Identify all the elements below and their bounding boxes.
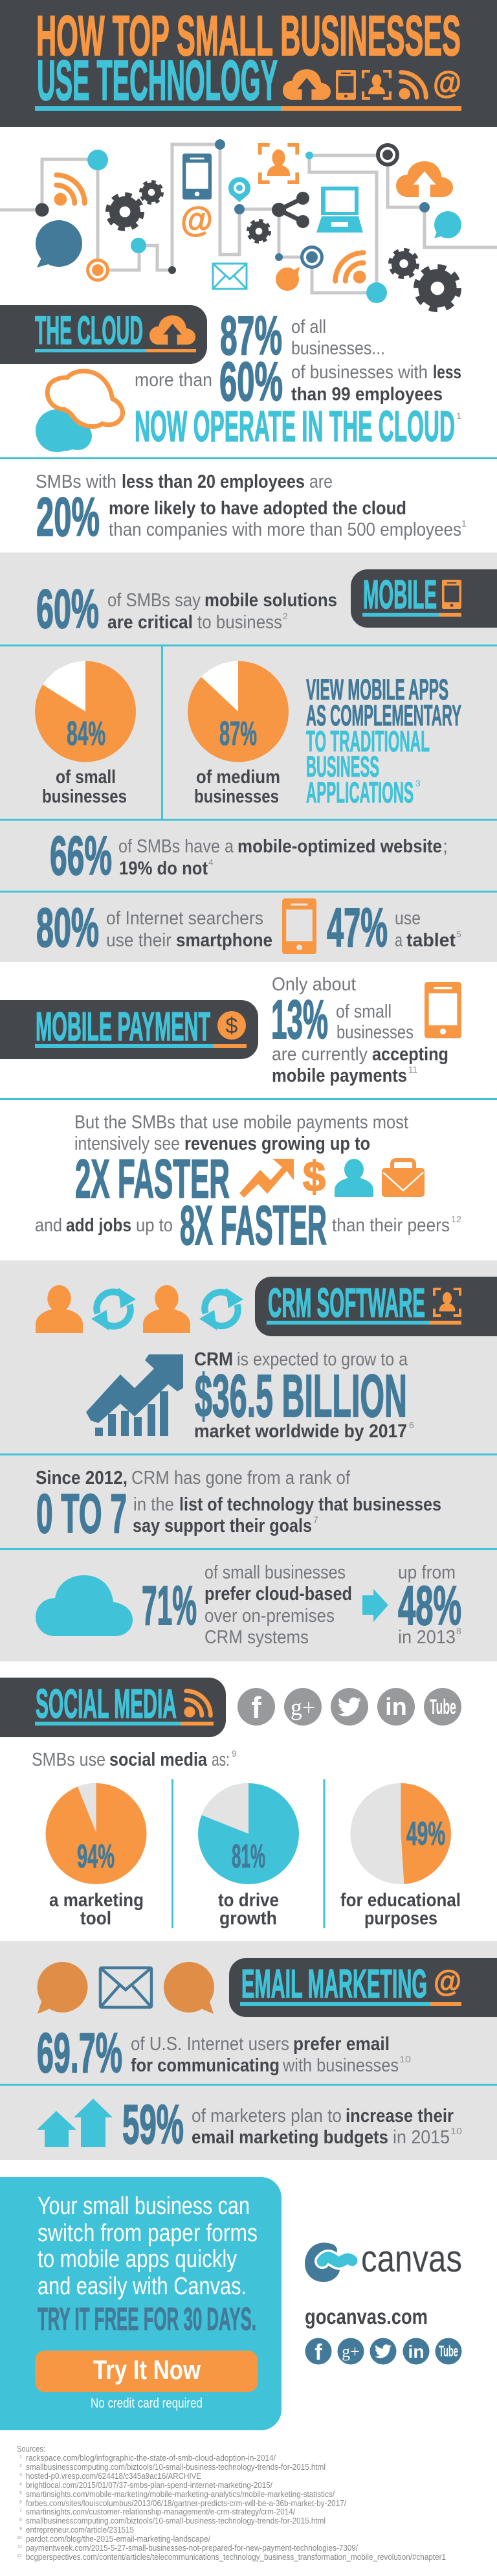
text: SMBs use social media as xyxy=(32,1748,237,1770)
panel: canvas brand xyxy=(305,2238,462,2365)
pie chart: 94 percent: tool xyxy=(80,1908,111,1929)
stat: 48 percent: up from xyxy=(398,1562,456,1583)
sources: 5 xyxy=(19,2491,22,2496)
stat: 36.5 billion: is expected to grow to a xyxy=(237,1349,408,1370)
pie chart: 49 percent: purposes xyxy=(364,1908,437,1929)
sources: 4 xyxy=(19,2482,22,2487)
stat: 59 percent: email marketing budgets xyxy=(192,2127,388,2148)
stat: 66 percent: 19% do not xyxy=(119,858,208,879)
icon: rss right xyxy=(335,253,366,283)
social icons gray: g+ xyxy=(291,1694,315,1720)
stat: 69.7 percent: for communicating xyxy=(131,2055,280,2076)
stat: 60 percent of SMBs: to business xyxy=(197,612,282,633)
text: SMBs use social media as: as: xyxy=(212,1750,230,1770)
stat: 48 percent: 8 xyxy=(456,1626,461,1636)
section tab xyxy=(0,1678,226,1737)
text: SMBs use social media as: SMBs use xyxy=(32,1750,105,1770)
social icons gray: f xyxy=(251,1691,261,1724)
stat: 71 percent: 71% xyxy=(142,1575,197,1637)
text block: revenues: intensively see xyxy=(74,1134,180,1154)
section tab: @ xyxy=(434,1964,461,1998)
icon: growth arrow xyxy=(239,1159,294,1198)
stat: 71 percent: CRM systems xyxy=(204,1627,309,1648)
stat: 2X faster: 2X FASTER xyxy=(75,1148,230,1209)
nodes xyxy=(35,139,430,303)
stat: 59 percent: 59% xyxy=(122,2094,184,2156)
stat: 69.7 percent: prefer email xyxy=(293,2034,390,2055)
illustration: two clouds xyxy=(36,371,122,452)
stat: 59 percent: 10 xyxy=(450,2126,462,2136)
social icons gray: Tube xyxy=(430,1695,456,1718)
stat: 80 percent smartphone: of Internet searchers xyxy=(106,908,263,929)
pie chart: 84 percent small businesses: businesses xyxy=(42,786,127,807)
pie chart: 87 percent medium businesses: businesses xyxy=(194,786,279,807)
pie chart: 94 percent xyxy=(45,1783,146,1929)
stat: 59 percent: increase their xyxy=(346,2106,454,2126)
pie chart: 49 percent: 49% xyxy=(406,1815,445,1852)
icon: person xyxy=(335,1159,373,1197)
panel: call to action xyxy=(0,2177,282,2430)
network illustration xyxy=(0,139,497,310)
sources: paymentweek.com/2015-5-27-small-businesses-not-prepared-for-new-payment-technologies-7309/ xyxy=(26,2544,358,2553)
header icons: @ xyxy=(433,66,461,100)
stat: 8X faster: up to xyxy=(136,1215,173,1236)
stat: 87 percent: businesses... xyxy=(291,338,385,359)
sources: pardot.com/blog/the-2015-email-marketing-landscape/ xyxy=(26,2535,210,2544)
stat: 48 percent xyxy=(398,1562,461,1648)
icon: teal cloud xyxy=(36,1575,133,1636)
icon: share xyxy=(272,192,309,228)
people and refresh icons xyxy=(36,1285,243,1333)
stat: 60 percent of SMBs: 2 xyxy=(283,611,288,621)
stat: 36.5 billion xyxy=(194,1349,414,1442)
stat: 66 percent: 66% xyxy=(50,825,112,886)
sources: bcgperspectives.com/content/articles/telecommunications_technology_business_transformation_mobile_revolution/#chapter1 xyxy=(26,2553,446,2562)
panel: header xyxy=(0,0,497,127)
text block: view mobile apps: BUSINESS xyxy=(306,750,379,783)
sources: hosted-p0.vresp.com/624418/c345a9ac16/ARCHIVE xyxy=(26,2472,201,2481)
sources: 6 xyxy=(19,2500,22,2505)
sources: Sources: xyxy=(17,2445,45,2454)
pie chart: 81 percent xyxy=(198,1783,299,1929)
stat: 60 percent: of businesses with xyxy=(291,362,428,383)
stat: 60 percent of SMBs: 60% xyxy=(36,578,99,639)
stat: 71 percent: prefer cloud-based xyxy=(204,1584,352,1604)
sources: smartinsights.com/mobile-marketing/mobile-marketing-analytics/mobile-marketing-statistics/ xyxy=(26,2490,335,2499)
sources: smartinsights.com/customer-relationship-management/e-crm-strategy/crm-2014/ xyxy=(26,2507,295,2516)
icon: envelope xyxy=(213,264,247,289)
section tab: $ xyxy=(226,1014,238,1038)
stat: 47 percent tablet: a xyxy=(395,930,403,951)
sources: forbes.com/sites/louiscolumbus/2013/06/18/gartner-predicts-crm-will-be-a-36b-market-by-2017/ xyxy=(26,2499,346,2508)
section tab: THE CLOUD xyxy=(35,308,143,352)
stat: 0 to 7: list of technology that businesses xyxy=(179,1494,441,1515)
stat: 36.5 billion: market worldwide by 2017 xyxy=(194,1421,407,1442)
stat: 60 percent of SMBs xyxy=(36,578,337,639)
stat: 71 percent: over on-premises xyxy=(204,1606,335,1626)
stat: 59 percent xyxy=(122,2094,462,2156)
button xyxy=(35,2351,258,2392)
pie chart: 84 percent small businesses: of small xyxy=(56,767,116,788)
logo word: canvas xyxy=(361,2238,462,2280)
icon: location pin xyxy=(228,177,250,202)
stat: 0 to 7: CRM has gone from a rank of xyxy=(131,1468,351,1488)
text block: view mobile apps: 3 xyxy=(415,778,421,788)
icon: up arrows xyxy=(37,2099,113,2147)
icon: bubble left xyxy=(38,1962,88,2014)
CTA text: Your small business can xyxy=(38,2193,250,2220)
stat: 0 to 7: in the xyxy=(133,1494,174,1515)
stat: 8X faster: 8X FASTER xyxy=(180,1195,327,1257)
stat: 87 percent xyxy=(220,305,385,366)
stat: 13 percent: accepting xyxy=(372,1044,448,1065)
stat: 69.7 percent xyxy=(37,2022,411,2084)
pie chart: 94 percent: a marketing xyxy=(49,1890,144,1911)
icon: dollar: $ xyxy=(303,1152,326,1200)
icon: rising chart arrow xyxy=(86,1354,183,1436)
icons: gears xyxy=(108,181,459,310)
pie chart: 87 percent medium businesses: 87% xyxy=(219,715,257,753)
stat: 47 percent tablet: use xyxy=(395,908,421,929)
stat: 80 percent smartphone: smartphone xyxy=(176,930,272,951)
social icons blue: in xyxy=(408,2342,424,2362)
sources: entrepreneur.com/article/231515 xyxy=(26,2525,134,2535)
sources: 10 xyxy=(17,2536,22,2540)
stat: 71 percent xyxy=(142,1562,352,1648)
sources: 3 xyxy=(19,2473,22,2478)
pie chart: 81 percent: growth xyxy=(219,1908,277,1929)
pie chart: 87 percent medium businesses xyxy=(188,661,289,807)
CTA text xyxy=(38,2193,258,2300)
stat: 13 percent: mobile payments xyxy=(272,1066,407,1086)
pie chart: 87 percent medium businesses: of medium xyxy=(196,767,280,788)
icon: laptop xyxy=(316,187,363,233)
stat: 20 percent: than companies with more than 500 employees xyxy=(109,519,461,540)
stat: 66 percent: 4 xyxy=(208,857,214,867)
sources: smallbusinesscomputing.com/biztools/10-small-business-technology-trends-for-2015.html xyxy=(26,2463,326,2472)
stat: 59 percent: in 2015 xyxy=(393,2127,450,2148)
stat: 36.5 billion: CRM xyxy=(194,1349,233,1370)
icon: at sign: @ xyxy=(181,200,213,239)
button: Try It Now xyxy=(93,2354,201,2385)
stat: 66 percent: ; xyxy=(443,836,448,857)
headline: now operate in the cloud: 1 xyxy=(456,411,461,421)
pie chart: 84 percent small businesses xyxy=(35,661,136,807)
CTA text: switch from paper forms xyxy=(38,2220,258,2247)
social icons blue xyxy=(305,2338,462,2365)
social icons gray: in xyxy=(385,1694,407,1721)
stat: 13 percent: are currently xyxy=(272,1044,368,1065)
stat: 80 percent smartphone: 80% xyxy=(36,897,99,958)
sources: rackspace.com/blog/infographic-the-state-of-smb-cloud-adoption-in-2014/ xyxy=(26,2454,276,2463)
stat: 71 percent: of small businesses xyxy=(204,1562,346,1583)
pie chart: 49 percent xyxy=(340,1783,461,1929)
stat: 66 percent: of SMBs have a xyxy=(118,836,234,857)
stat: 59 percent: of marketers plan to xyxy=(192,2106,342,2126)
stat: 0 to 7: say support their goals xyxy=(133,1516,312,1536)
sources: 11 xyxy=(17,2545,22,2549)
sources: brightlocal.com/2015/01/07/37-smbs-plan-spend-internet-marketing-2015/ xyxy=(26,2481,272,2490)
stat: 13 percent: 11 xyxy=(408,1064,417,1075)
pie chart: 84 percent small businesses: 84% xyxy=(67,715,105,753)
stat: 8X faster: 12 xyxy=(451,1214,461,1224)
stat: 47 percent tablet: 5 xyxy=(456,929,461,939)
sources: 2 xyxy=(19,2464,22,2468)
text block: revenues: But the SMBs that use mobile payments most xyxy=(74,1112,408,1133)
stat: 69.7 percent: 69.7% xyxy=(37,2022,122,2084)
stat: 20 percent: SMBs with xyxy=(36,472,116,492)
panel: CRM software xyxy=(0,1260,497,1661)
stat: 0 to 7 xyxy=(36,1468,441,1545)
icon: teal bubble xyxy=(434,211,461,238)
text block: revenues: revenues growing up to xyxy=(184,1134,370,1154)
icon: blue phone xyxy=(182,154,212,199)
sources xyxy=(17,2445,446,2562)
text: SMBs use social media as: social media xyxy=(109,1750,208,1770)
stat: 60 percent: less xyxy=(433,362,461,383)
section tab: SOCIAL MEDIA xyxy=(36,1681,177,1727)
icon: person frame xyxy=(258,143,299,184)
stat: 20 percent: 1 xyxy=(461,518,467,529)
stat: 13 percent: 13% xyxy=(271,989,328,1050)
stat: 0 to 7: 7 xyxy=(313,1514,318,1525)
stat: 87 percent: 87% xyxy=(220,305,282,366)
stat: 20 percent: are xyxy=(309,472,333,492)
text: SMBs use social media as: 9 xyxy=(232,1748,237,1759)
icon: envelope xyxy=(100,1968,151,2007)
stat: 60 percent of SMBs: mobile solutions xyxy=(204,590,337,611)
stat: 60 percent: than 99 employees xyxy=(291,384,443,405)
section tab: MOBILE PAYMENT xyxy=(36,1005,210,1049)
stat: 20 percent xyxy=(36,472,467,547)
stat: 47 percent tablet: tablet xyxy=(406,930,456,951)
social icons blue: f xyxy=(315,2340,322,2365)
stat: 20 percent: 20% xyxy=(36,486,100,547)
CTA headline: TRY IT FREE FOR 30 DAYS. xyxy=(38,2302,256,2337)
stat: 8X faster: add jobs xyxy=(66,1215,131,1236)
icon: orange phone xyxy=(282,898,316,954)
stat: 20 percent: more likely to have adopted the cloud xyxy=(109,498,406,519)
sources: 9 xyxy=(19,2527,22,2531)
sources: smallbusinesscomputing.com/biztools/10-small-business-technology-trends-for-2015.html xyxy=(26,2516,326,2525)
stat: 66 percent: mobile-optimized website xyxy=(237,836,442,857)
pie chart: 94 percent: 94% xyxy=(77,1838,115,1875)
pie chart: 81 percent: to drive xyxy=(218,1890,279,1911)
panel: the cloud xyxy=(0,305,497,547)
panel: email marketing xyxy=(0,1941,497,2160)
pie chart: 49 percent: for educational xyxy=(340,1890,461,1911)
stat: 13 percent: of small xyxy=(336,1001,392,1022)
stat: 13 percent: businesses xyxy=(337,1022,414,1043)
stat: 60 percent: more than xyxy=(135,370,212,391)
social icons gray xyxy=(237,1688,461,1726)
panel: mobile payment xyxy=(0,974,497,1257)
stat: 8X faster: than their peers xyxy=(332,1215,450,1236)
stat: 69.7 percent: with businesses xyxy=(282,2055,399,2076)
arrow xyxy=(362,1589,388,1622)
stat: 60 percent of SMBs: are critical xyxy=(107,612,193,633)
stat: 60 percent: 60% xyxy=(219,351,283,412)
icon: rss left xyxy=(54,175,85,205)
stat: 60 percent of SMBs: of SMBs say xyxy=(107,590,201,611)
url: gocanvas.com xyxy=(305,2305,428,2329)
stat: 0 to 7: 0 TO 7 xyxy=(36,1483,127,1545)
stat: 36.5 billion: 6 xyxy=(409,1420,414,1430)
stat: 60 percent xyxy=(135,351,461,412)
stat: 87 percent: of all xyxy=(291,317,326,337)
stat: 69.7 percent: 10 xyxy=(399,2054,411,2064)
sources: 1 xyxy=(19,2455,22,2459)
panel: social media xyxy=(0,1678,461,1929)
header icons xyxy=(283,66,461,100)
icon: orange phone xyxy=(425,982,461,1038)
sources: 8 xyxy=(19,2518,22,2522)
social icons blue: Tube xyxy=(439,2343,458,2360)
icon: blue speech bubble xyxy=(36,220,82,268)
stat: 13 percent xyxy=(271,974,448,1086)
section tab xyxy=(0,305,207,364)
stat: 0 to 7: Since 2012, xyxy=(36,1468,127,1488)
stat: 13 percent: Only about xyxy=(272,974,356,995)
sources: 12 xyxy=(17,2554,22,2559)
text block: revenues xyxy=(74,1112,408,1154)
icon: bag xyxy=(382,1160,425,1197)
stat: 8X faster: and xyxy=(35,1215,62,1236)
stat: 69.7 percent: of U.S. Internet users xyxy=(131,2034,289,2055)
section tab xyxy=(0,1000,258,1059)
sources: 7 xyxy=(19,2509,22,2513)
CTA text: to mobile apps quickly xyxy=(38,2246,237,2273)
stat: 66 percent xyxy=(50,825,448,886)
panel: mobile xyxy=(0,553,497,962)
stat: 80 percent smartphone: use their xyxy=(106,930,171,951)
note: No credit card required xyxy=(91,2396,203,2411)
stat: 48 percent: in 2013 xyxy=(398,1627,456,1648)
social icons blue: g+ xyxy=(342,2342,360,2361)
stat: 20 percent: less than 20 employees xyxy=(122,472,305,492)
pie chart: 81 percent: 81% xyxy=(232,1838,265,1875)
logo mark xyxy=(312,2250,352,2275)
CTA text: and easily with Canvas. xyxy=(38,2273,247,2300)
stat: 47 percent tablet: 47% xyxy=(327,897,388,958)
stat: 8X faster xyxy=(35,1195,461,1257)
icon: orange cloud upload xyxy=(396,161,453,197)
text block: view mobile apps xyxy=(306,673,461,809)
icon: bubble right xyxy=(164,1962,214,2014)
stat: 80 percent smartphone xyxy=(36,897,272,958)
icon: orange bubble xyxy=(276,267,300,291)
